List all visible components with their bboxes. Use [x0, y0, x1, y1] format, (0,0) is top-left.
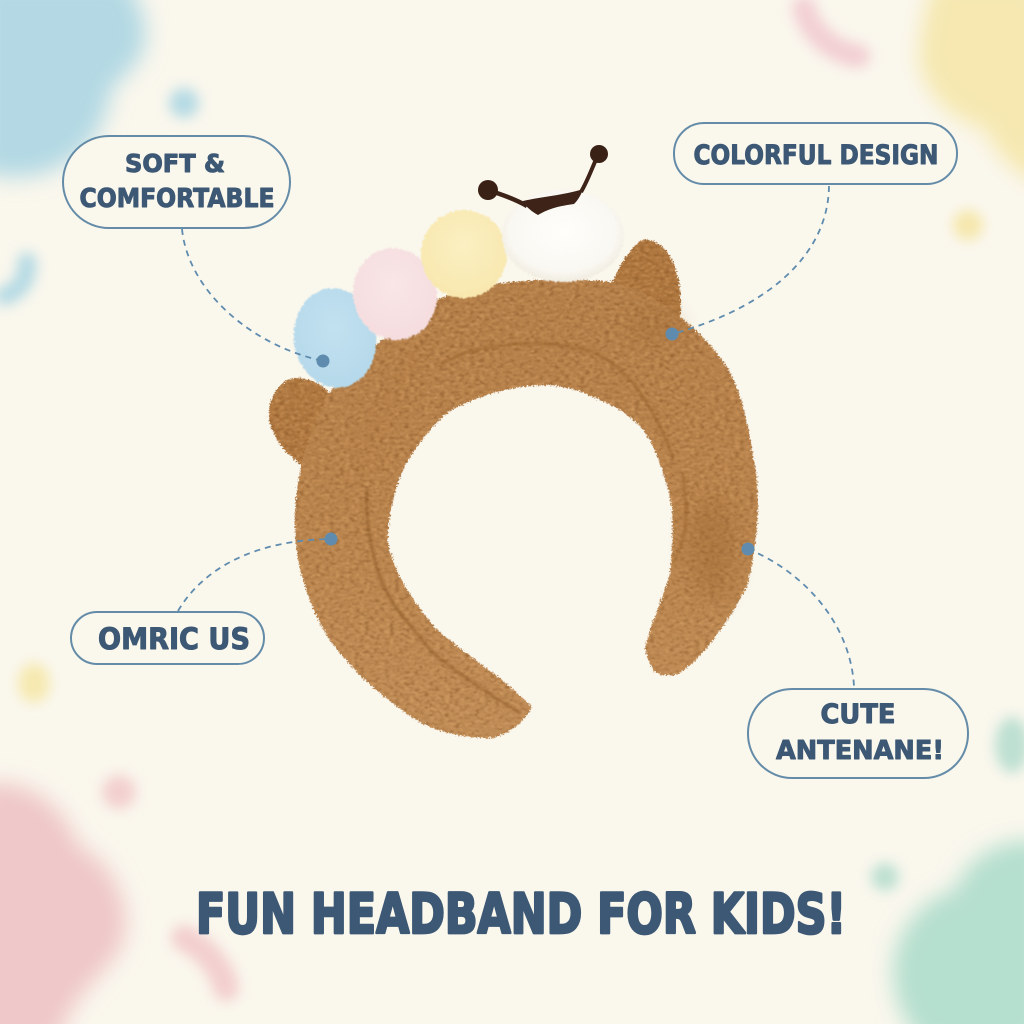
callout: omric	[71, 612, 264, 664]
headband	[269, 145, 758, 738]
pompom: blue	[287, 283, 383, 393]
pompom: pink	[344, 240, 446, 348]
ear: left	[269, 378, 335, 466]
callout: colorful: COLORFUL DESIGN	[694, 140, 938, 171]
callout: omric: OMRIC US	[98, 622, 250, 656]
band	[295, 280, 758, 738]
ear: right	[612, 240, 681, 320]
pompom: white	[502, 190, 624, 282]
callout: colorful	[674, 123, 957, 184]
connector: soft	[182, 229, 330, 368]
callout: soft	[63, 136, 290, 228]
connector: cute	[742, 542, 854, 686]
antennae	[478, 145, 608, 215]
callout: soft: SOFT &	[125, 149, 225, 178]
callout: cute	[748, 689, 968, 778]
callout: cute: ANTENANE!	[776, 736, 944, 766]
band shading	[362, 307, 736, 713]
title: FUN HEADBAND FOR KIDS!	[196, 882, 846, 946]
pompom: yellow	[421, 210, 507, 298]
callout: soft: COMFORTABLE	[80, 184, 274, 214]
callout: cute: CUTE	[820, 699, 896, 730]
connector: omric	[178, 532, 338, 611]
connector: colorful	[666, 186, 829, 340]
